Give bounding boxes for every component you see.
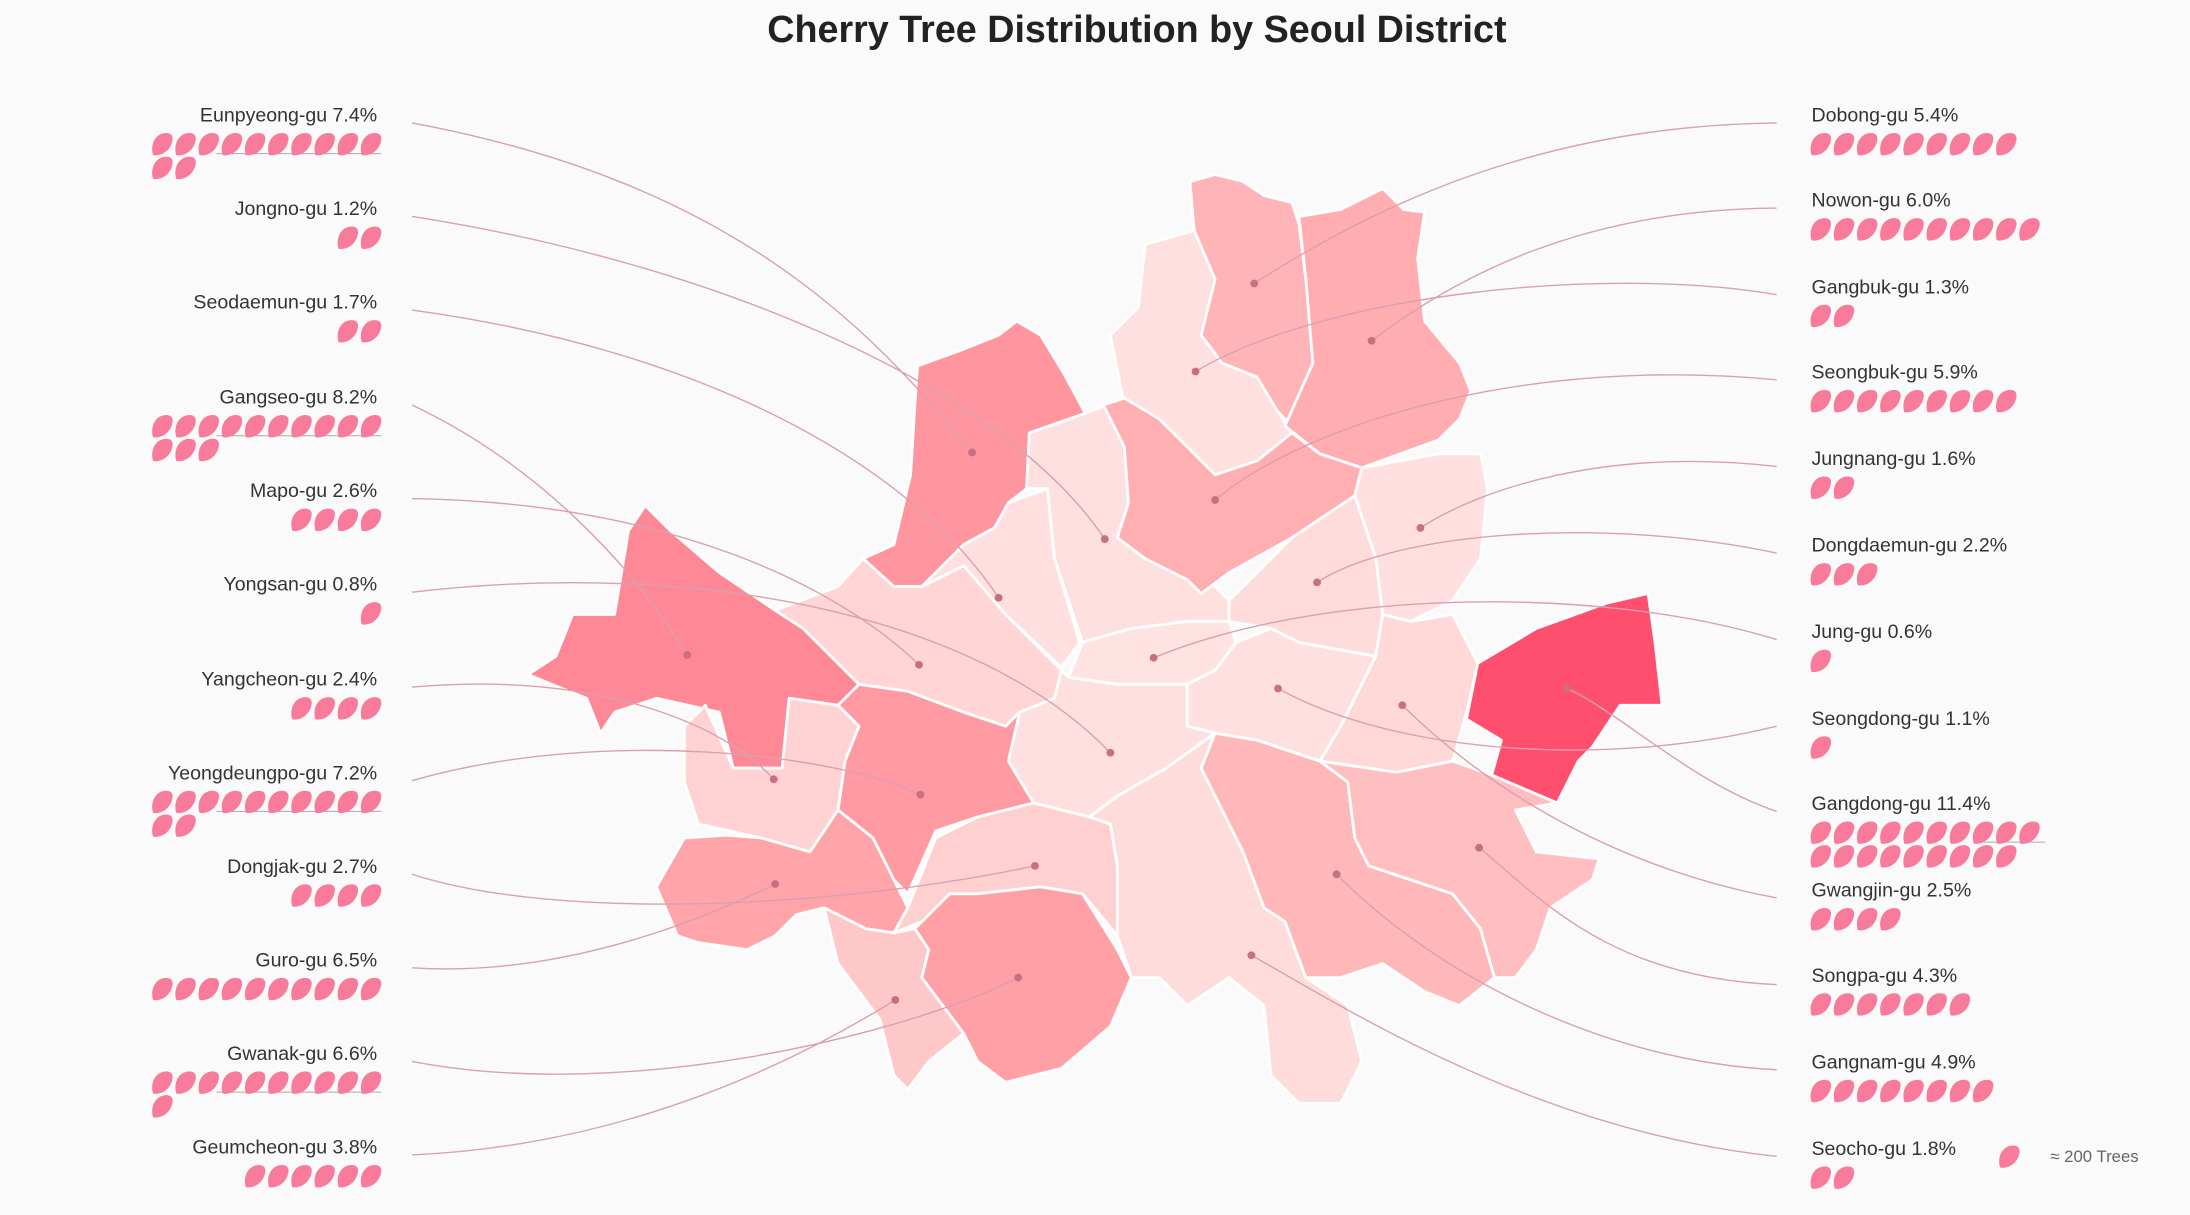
district: Songpa — [1320, 761, 1599, 978]
label: Seocho — [1811, 1138, 1956, 1189]
label: Seodaemun: Seodaemun-gu 1.7% — [193, 292, 377, 314]
district: Eunpyeong — [863, 321, 1085, 587]
label: Jungnang — [1811, 448, 1976, 499]
district: Jung — [1068, 621, 1236, 684]
label: Eunpyeong — [152, 105, 381, 179]
label: Dobong: Dobong-gu 5.4% — [1811, 105, 1958, 126]
legend: ≈ 200 Trees — [2050, 1147, 2139, 1166]
district: Gangbuk — [1110, 230, 1292, 475]
map of Seoul districts — [528, 175, 1662, 1103]
district: Yeongdeungpo — [838, 684, 1034, 894]
label: Gwangjin: Gwangjin-gu 2.5% — [1811, 880, 1971, 902]
label: Seocho: Seocho-gu 1.8% — [1811, 1138, 1956, 1160]
label: Nowon — [1811, 190, 2040, 241]
label: Guro: Guro-gu 6.5% — [255, 949, 377, 971]
district: Gangdong — [1467, 594, 1662, 803]
label: Yangcheon: Yangcheon-gu 2.4% — [201, 669, 377, 691]
label: Gangdong: Gangdong-gu 11.4% — [1811, 793, 1990, 815]
label: Jung: Jung-gu 0.6% — [1811, 621, 1932, 643]
district: Gwangjin — [1320, 614, 1478, 772]
district: Gangseo — [528, 506, 859, 768]
label: Seongbuk — [1811, 361, 2017, 412]
label: Jongno: Jongno-gu 1.2% — [235, 198, 377, 220]
district: Seocho — [1089, 733, 1362, 1103]
district: Dobong — [1190, 175, 1313, 426]
label: Gwanak: Gwanak-gu 6.6% — [227, 1043, 377, 1065]
label: Songpa — [1811, 965, 1970, 1016]
label: Seodaemun — [193, 292, 381, 343]
label: Dongjak — [227, 856, 381, 907]
label: Geumcheon: Geumcheon-gu 3.8% — [192, 1137, 377, 1159]
legend — [1999, 1145, 2139, 1168]
label: Gangnam — [1811, 1051, 1993, 1102]
label: Gwangjin — [1811, 880, 1971, 930]
district: Yongsan — [1008, 670, 1215, 817]
label: Gwanak — [152, 1043, 381, 1118]
district: Jongno — [1027, 405, 1229, 642]
label: Gangseo: Gangseo-gu 8.2% — [220, 387, 377, 409]
label: Yongsan — [223, 574, 381, 625]
label: Dongdaemun — [1811, 535, 2007, 586]
district: Guro — [656, 810, 908, 950]
label: Songpa: Songpa-gu 4.3% — [1811, 965, 1957, 987]
district: Dongdaemun — [1229, 496, 1383, 656]
district: Dongjak — [894, 803, 1117, 936]
leader lines — [412, 123, 1777, 1156]
label: Yongsan: Yongsan-gu 0.8% — [223, 574, 377, 596]
district: Seongbuk — [1103, 398, 1362, 594]
label: Guro — [152, 949, 381, 1000]
district: Gangnam — [1201, 733, 1494, 1006]
label: Dobong — [1811, 105, 2017, 155]
label: Geumcheon — [192, 1137, 381, 1187]
district: Jungnang — [1355, 454, 1487, 621]
district: Yangcheon — [684, 698, 859, 852]
district: Seodaemun — [922, 489, 1080, 668]
label: Dongdaemun: Dongdaemun-gu 2.2% — [1811, 535, 2007, 557]
label: Yeongdeungpo: Yeongdeungpo-gu 7.2% — [168, 762, 377, 784]
district centroid dots — [683, 280, 1571, 1004]
label: Seongbuk: Seongbuk-gu 5.9% — [1811, 361, 1978, 383]
district: Gwanak — [915, 887, 1131, 1082]
label: Dongjak: Dongjak-gu 2.7% — [227, 856, 377, 878]
label: Seongdong — [1811, 708, 1990, 759]
label: Gangbuk — [1811, 276, 1969, 327]
district: Mapo — [775, 559, 1061, 726]
label: Jungnang: Jungnang-gu 1.6% — [1811, 448, 1976, 470]
label: Yeongdeungpo — [152, 762, 381, 837]
label: Jongno — [235, 198, 381, 249]
right labels column — [1811, 105, 2045, 1189]
label: Mapo: Mapo-gu 2.6% — [250, 480, 377, 502]
label: Yangcheon — [201, 669, 381, 720]
label: Gangnam: Gangnam-gu 4.9% — [1811, 1051, 1976, 1073]
label: Mapo — [250, 480, 381, 531]
district: Nowon — [1285, 189, 1471, 468]
label: Gangdong — [1811, 793, 2045, 868]
label: Gangbuk: Gangbuk-gu 1.3% — [1811, 276, 1969, 298]
label: Jung — [1811, 621, 1932, 672]
left labels column — [152, 105, 381, 1187]
label: Gangseo — [152, 387, 381, 461]
title: Cherry Tree Distribution by Seoul District — [767, 8, 1507, 50]
label: Nowon: Nowon-gu 6.0% — [1811, 190, 1951, 212]
district: Seongdong — [1187, 628, 1376, 761]
district: Geumcheon — [824, 908, 964, 1089]
label: Eunpyeong: Eunpyeong-gu 7.4% — [200, 105, 377, 126]
label: Seongdong: Seongdong-gu 1.1% — [1811, 708, 1990, 730]
